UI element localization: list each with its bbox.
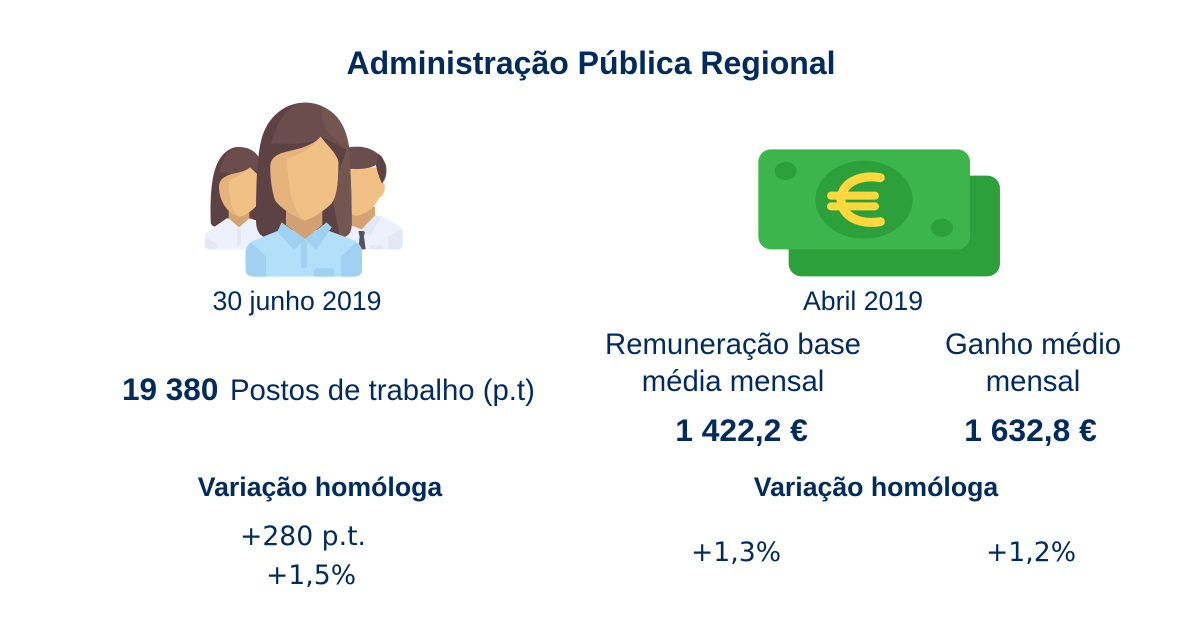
variation: +280 p.t.: +280 p.t.	[240, 521, 366, 552]
back note	[789, 176, 1000, 276]
label: remuneração base: média mensal	[642, 365, 824, 398]
stat: posts value: 19 380	[122, 371, 218, 407]
variation: +1,3%: +1,3%	[691, 537, 781, 568]
label: ganho médio: Ganho médio	[945, 328, 1121, 361]
variation: +1,2%: +1,2%	[986, 537, 1076, 568]
stat: posts label: Postos de trabalho (p.t)	[230, 374, 535, 407]
date: 30 junho 2019: 30 junho 2019	[213, 286, 381, 316]
front woman	[246, 103, 362, 277]
icon: group of people	[205, 103, 403, 277]
variation: +1,5%: +1,5%	[266, 560, 356, 591]
heading: variação homóloga right: Variação homóloga	[754, 472, 998, 502]
label: ganho médio: mensal	[986, 365, 1080, 398]
icon: euro banknotes	[758, 149, 1000, 276]
heading: variação homóloga left: Variação homóloga	[198, 472, 442, 502]
front note	[758, 149, 970, 249]
corner dots	[775, 161, 953, 239]
euro symbol	[831, 177, 880, 222]
value: 1 422,2 €: 1 422,2 €	[675, 412, 808, 448]
title: Administração Pública Regional	[346, 45, 836, 81]
date: Abril 2019: Abril 2019	[803, 286, 923, 316]
label: remuneração base: Remuneração base	[605, 328, 861, 361]
back right man	[345, 147, 403, 249]
value: 1 632,8 €: 1 632,8 €	[964, 412, 1097, 448]
back left woman	[205, 147, 265, 249]
